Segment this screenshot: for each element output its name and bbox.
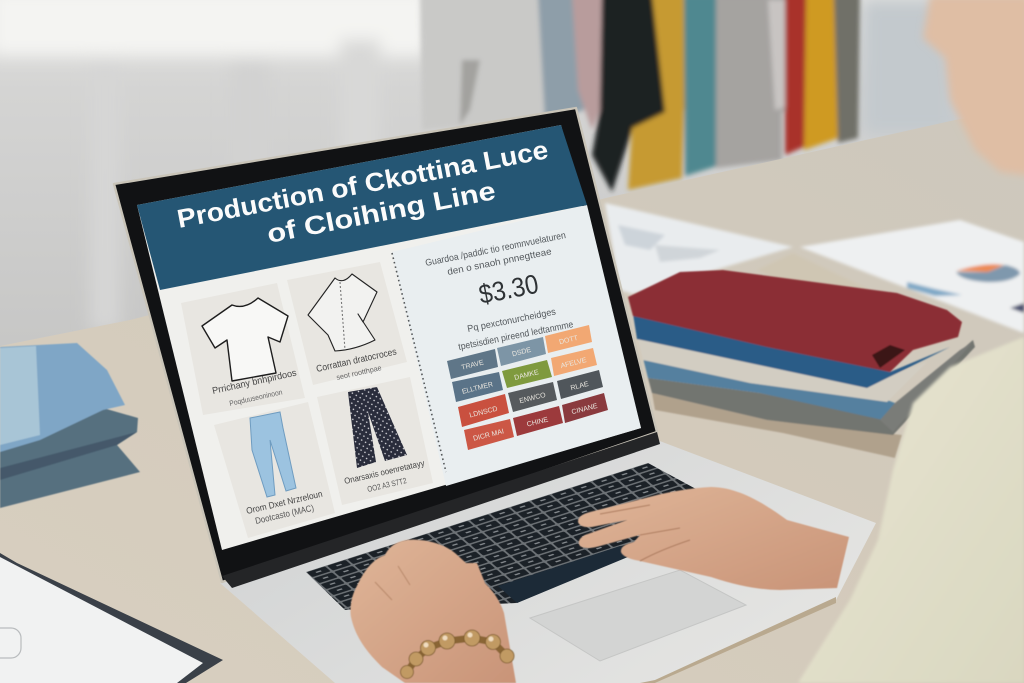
laptop lid	[114, 108, 660, 588]
dotted divider	[392, 253, 446, 472]
colour tile grid: AFELVE	[560, 357, 588, 370]
summary text: Guardoa /paddic tio reomnvuelaturen	[424, 230, 567, 269]
person: sleeve	[798, 337, 1024, 683]
card: patterned trousers: OO2 A3 S7T2	[366, 476, 408, 494]
icon: patterned trousers	[348, 387, 407, 468]
laptop screen infographic	[137, 125, 641, 550]
spacebar band	[498, 546, 640, 603]
colour tile grid: CHINE	[526, 416, 549, 429]
price: $3.30	[476, 269, 541, 310]
title: of Cloihing Line	[264, 175, 498, 249]
grey right side	[880, 342, 973, 432]
stripe panel	[0, 346, 40, 445]
colour tile grid: ENWCO	[519, 392, 547, 405]
card: patterned trousers	[317, 377, 433, 505]
card: jeans	[214, 402, 335, 538]
card: t-shirt	[181, 283, 305, 415]
colour tile grid: LDNSCD	[469, 406, 498, 419]
folded jeans left	[0, 343, 140, 508]
left hand on keyboard	[350, 540, 516, 683]
colour tile grid: TRAVE	[461, 359, 485, 372]
clipboard	[0, 553, 223, 683]
bracelet	[400, 630, 514, 678]
card: button shirt: seot rootthpae	[335, 363, 382, 382]
background wall and curtain	[0, 0, 1024, 360]
title: Production of Ckottina Luce	[175, 134, 551, 234]
burgundy layer	[628, 270, 962, 372]
person: face	[923, 0, 1024, 176]
laptop base	[220, 440, 876, 683]
keyboard	[306, 463, 696, 610]
icon: t-shirt	[202, 298, 288, 381]
navy layer	[633, 314, 950, 388]
colour tile grid: DAMKE	[514, 369, 540, 382]
colour tile grid: RLAE	[570, 381, 590, 392]
colour tile grid: DOTT	[559, 335, 579, 346]
card: button shirt: Corrattan dratocroces	[315, 346, 398, 375]
summary text: tpetsisdien pireend ledtanmme	[457, 319, 574, 353]
trackpad	[530, 570, 746, 661]
card: button shirt	[287, 262, 407, 385]
summary text	[424, 230, 574, 353]
colour tile grid: CINANE	[571, 403, 599, 416]
cream layer	[638, 338, 927, 402]
paper on clipboard	[0, 557, 203, 683]
folded clothes stack	[628, 270, 975, 458]
grey layer	[648, 340, 975, 435]
card: jeans: Orom Dxet Nrzreloun	[245, 489, 323, 516]
icon: jeans	[250, 412, 296, 497]
icon: button shirt	[308, 274, 377, 351]
pie chart on paper	[956, 264, 1020, 282]
papers on table	[605, 203, 1024, 333]
summary text: Pq pexctonurcheidges	[466, 306, 557, 335]
colour tile grid	[447, 325, 608, 450]
header band	[137, 125, 587, 290]
taupe layer	[652, 393, 902, 458]
right hand on keyboard	[578, 487, 849, 590]
card: patterned trousers: Onarsaxis ooenretatayy	[343, 458, 426, 486]
colour tile grid: ELLTMER	[461, 381, 494, 396]
card: t-shirt: Poqduuseoninoon	[228, 387, 283, 408]
beige fabric behind stack	[757, 253, 870, 290]
denim layer	[643, 358, 895, 420]
card: jeans: Dootcasto (MAC)	[254, 503, 315, 526]
card: t-shirt: Prrichany bnhpirdoos	[211, 368, 298, 397]
colour tile grid: DICR MAI	[473, 428, 505, 443]
summary text: den o snaoh pnnegtteae	[446, 246, 553, 278]
clothes rack	[420, 0, 860, 192]
colour tile grid: DSDE	[511, 347, 532, 358]
